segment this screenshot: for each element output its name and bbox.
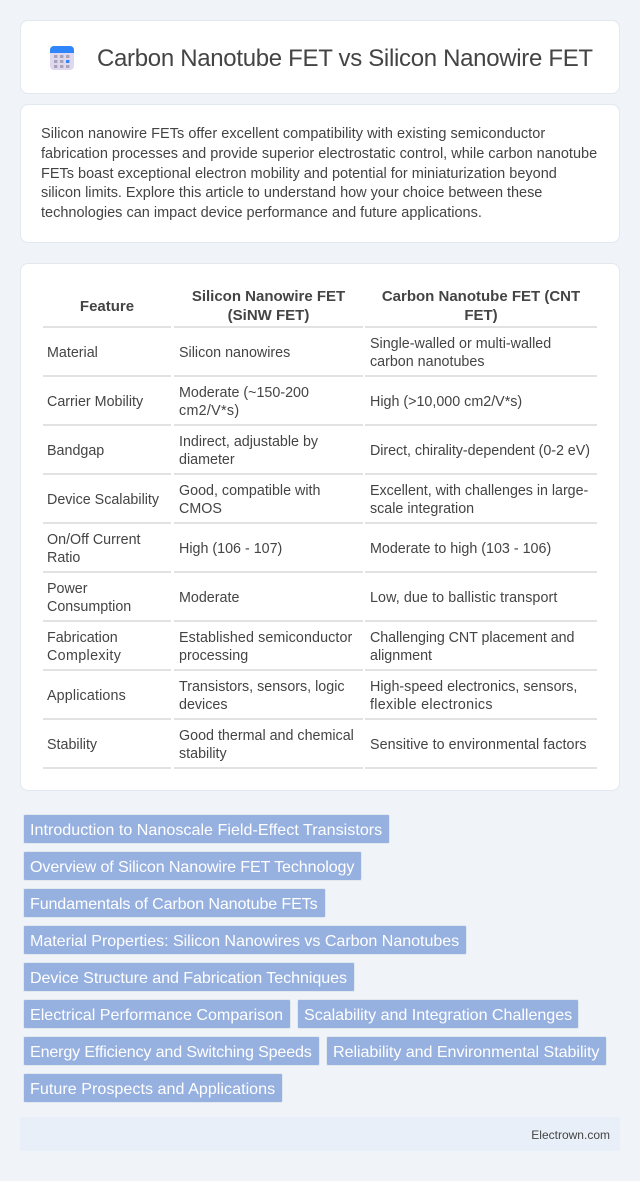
tag: silicon nanowire overview: Overview of Silicon Nanowire FET Technology [30,858,354,876]
row: power consumption: Moderate [179,590,239,606]
tag: future prospects: Future Prospects and Applications [30,1080,275,1098]
footer [20,1117,620,1151]
row: carrier mobility [43,385,597,426]
row: device scalability: scale integration [370,501,474,517]
row: device scalability: CMOS [179,501,222,517]
row: fabrication complexity: Complexity [47,648,121,664]
row: bandgap: Indirect, adjustable by [179,434,318,450]
row: bandgap: Bandgap [47,443,104,459]
row: carrier mobility: Moderate (~150-200 [179,385,309,401]
row: device scalability [43,483,597,524]
row: on/off current ratio [43,532,597,573]
row: carrier mobility: cm2/V*s) [179,403,239,419]
row: on/off current ratio: Ratio [47,550,80,566]
row: applications: Transistors, sensors, logic [179,679,345,695]
row: bandgap [43,434,597,475]
row: material: Silicon nanowires [179,345,290,361]
tag: energy efficiency [23,1036,320,1066]
tag: scalability [297,999,579,1029]
row: carrier mobility: High (>10,000 cm2/V*s) [370,394,522,410]
row: bandgap: diameter [179,452,235,468]
row: on/off current ratio: High (106 - 107) [179,541,282,557]
tag: introduction [23,814,390,844]
text block: introduction: technologies can impact device performance and future applications. [41,205,482,221]
row: fabrication complexity: Fabrication [47,630,118,646]
footer credit: Electrown.com [531,1128,610,1142]
row: stability: Good thermal and chemical [179,728,354,744]
row: stability: stability [179,746,227,762]
title: Carbon Nanotube FET vs Silicon Nanowire FET [97,45,593,72]
row: material: Material [47,345,98,361]
row: bandgap: Direct, chirality-dependent (0-2 eV) [370,443,590,459]
row: applications: flexible electronics [370,697,493,713]
panel: title [20,20,620,94]
tag: carbon nanotube fundamentals: Fundamentals of Carbon Nanotube FETs [30,895,318,913]
row: power consumption [43,581,597,622]
panel: comparison table [20,263,620,791]
tag: device structure [23,962,355,992]
tag: scalability: Scalability and Integration Challenges [304,1006,572,1024]
tag: electrical performance: Electrical Performance Comparison [30,1006,283,1024]
tag: energy efficiency: Energy Efficiency and Switching Speeds [30,1043,312,1061]
tag: reliability: Reliability and Environmental Stability [333,1043,599,1061]
text block: introduction: FETs boast exceptional electron mobility and potential for miniaturization beyond [41,166,557,182]
row: stability: Sensitive to environmental factors [370,737,587,753]
text block: introduction: Silicon nanowire FETs offer excellent compatibility with existing semiconductor [41,126,545,142]
tag: device structure: Device Structure and Fabrication Techniques [30,969,347,987]
row: device scalability: Device Scalability [47,492,159,508]
tag: reliability [326,1036,607,1066]
row: fabrication complexity [43,630,597,671]
text block: introduction [41,126,597,221]
row: device scalability: Excellent, with challenges in large- [370,483,588,499]
row: stability: Stability [47,737,97,753]
table header: (SiNW FET) [228,307,309,324]
row: power consumption: Consumption [47,599,131,615]
icon: calendar [50,46,74,70]
text block: introduction: fabrication processes and provide superior electrostatic control, while carbon nanotube [41,146,597,162]
tag: material properties: Material Properties: Silicon Nanowires vs Carbon Nanotubes [30,932,459,950]
tag: introduction: Introduction to Nanoscale Field-Effect Transistors [30,821,382,839]
table header: FET) [464,307,498,324]
row: fabrication complexity: Challenging CNT placement and [370,630,574,646]
row: applications [43,679,597,720]
tag: material properties [23,925,467,955]
text block: introduction: silicon limits. Explore this article to understand how your choice between these [41,185,542,201]
table header: Silicon Nanowire FET [192,288,345,305]
panel: introduction [20,104,620,243]
tag: future prospects [23,1073,283,1103]
row: fabrication complexity: processing [179,648,248,664]
row: power consumption: Power [47,581,88,597]
row: material [43,336,597,377]
tag: electrical performance [23,999,291,1029]
tag: silicon nanowire overview [23,851,362,881]
row: applications: Applications [47,688,126,704]
row: carrier mobility: Carrier Mobility [47,394,143,410]
row: on/off current ratio: Moderate to high (103 - 106) [370,541,551,557]
row: stability [43,728,597,769]
table header: Feature [80,298,134,315]
row: power consumption: Low, due to ballistic transport [370,590,557,606]
row: applications: High-speed electronics, sensors, [370,679,577,695]
row: device scalability: Good, compatible with [179,483,320,499]
row: material: carbon nanotubes [370,354,484,370]
table header [43,288,597,328]
row: fabrication complexity: Established semiconductor [179,630,352,646]
table header: Carbon Nanotube FET (CNT [382,288,580,305]
row: applications: devices [179,697,227,713]
row: material: Single-walled or multi-walled [370,336,551,352]
row: on/off current ratio: On/Off Current [47,532,140,548]
tag: carbon nanotube fundamentals [23,888,326,918]
row: fabrication complexity: alignment [370,648,432,664]
